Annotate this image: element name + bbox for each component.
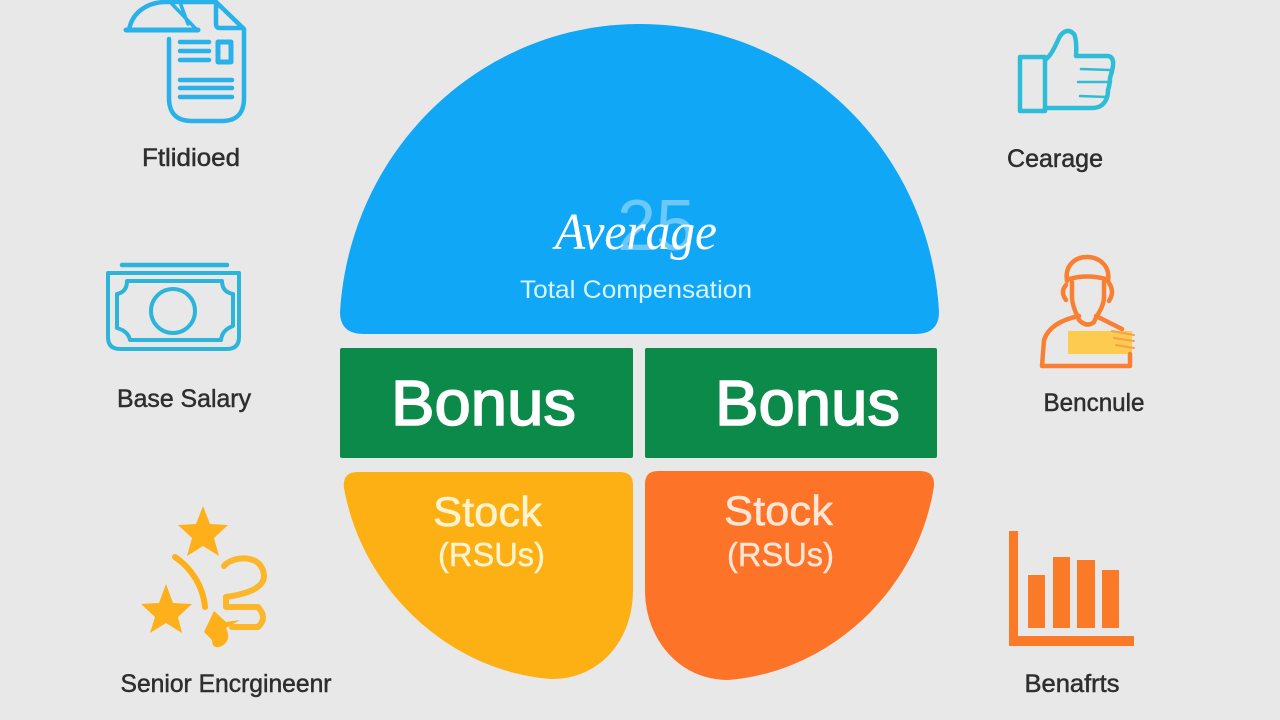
icon: document with dome xyxy=(126,2,244,121)
panel: stock left: Stock xyxy=(433,488,543,535)
icon: bar chart xyxy=(1009,531,1134,646)
panel: stock left: (RSUs) xyxy=(438,536,545,573)
heading: average: Average xyxy=(552,204,717,261)
panel: stock right: Stock xyxy=(724,487,834,534)
panel: stock right: (RSUs) xyxy=(727,536,834,573)
ghost number: 25 xyxy=(617,186,695,266)
icon: stars and squiggles xyxy=(141,506,264,647)
label: ftlidioed: Ftlidioed xyxy=(142,144,240,172)
panel: bonus right: Bonus xyxy=(715,367,900,439)
icon: thumbs up xyxy=(1020,31,1113,111)
icon: person with headset xyxy=(1042,257,1134,366)
panel: stock left xyxy=(344,472,633,679)
panel: bonus left: Bonus xyxy=(391,367,576,439)
panel: stock right xyxy=(645,471,934,680)
panel: blue dome, average total compensation xyxy=(340,24,939,334)
subheading: total compensation: Total Compensation xyxy=(520,276,752,304)
label: cearage: Cearage xyxy=(1007,145,1103,173)
icon: banknote xyxy=(108,265,239,349)
panel: bonus right xyxy=(645,348,937,458)
panel: bonus left xyxy=(340,348,633,458)
label: benafrts: Benafrts xyxy=(1024,670,1120,698)
label: base salary: Base Salary xyxy=(117,385,251,413)
label: senior engineer: Senior Encrgineenr xyxy=(120,670,332,698)
label: bencnule: Bencnule xyxy=(1044,389,1144,417)
